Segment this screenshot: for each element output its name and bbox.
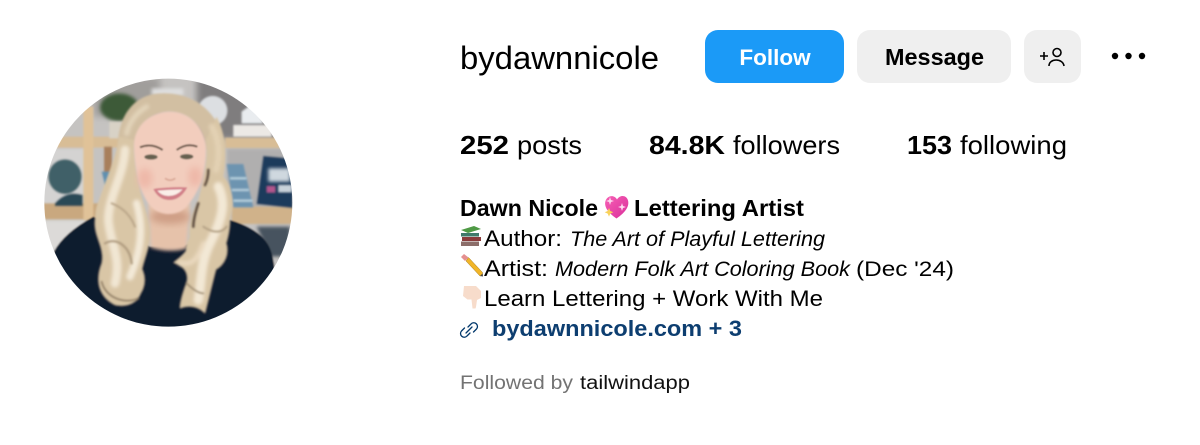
followed by note: Followed by <box>460 373 574 394</box>
bio line: artist <box>484 256 954 281</box>
follow button: Follow <box>739 45 811 70</box>
followed by note: tailwindapp <box>580 373 690 394</box>
stat: following <box>907 130 1067 160</box>
stat: posts <box>460 130 582 160</box>
hair shadows <box>102 170 227 301</box>
face <box>134 112 206 214</box>
follow button <box>705 30 844 83</box>
followed by note <box>460 373 690 394</box>
stat: followers <box>649 130 840 160</box>
stat: followers: 84.8K <box>649 130 725 160</box>
add friend button <box>1024 30 1081 83</box>
bio line: artist: Artist: <box>484 256 548 281</box>
message button <box>857 30 1011 83</box>
stat: following: following <box>960 130 1067 160</box>
icon: pencil <box>461 254 483 276</box>
hair masses <box>95 93 233 313</box>
navy sweater <box>50 217 276 337</box>
bio line: author: Author: <box>484 226 562 251</box>
more options dots <box>1112 53 1145 59</box>
stat: posts: posts <box>517 130 582 160</box>
photo background shelves <box>44 78 292 268</box>
bio line: author: The Art of Playful Lettering <box>570 227 825 251</box>
bio line: artist: (Dec '24) <box>856 257 954 281</box>
bio name: Dawn Nicole <box>460 195 598 221</box>
profile photo <box>40 77 300 337</box>
icon: sparkling heart <box>605 196 628 218</box>
hair highlights <box>108 107 222 300</box>
icon: link <box>461 323 477 337</box>
neck <box>148 203 190 251</box>
instagram profile header <box>44 30 1146 393</box>
stat: following: 153 <box>907 130 952 160</box>
stat: followers: followers <box>733 130 840 160</box>
bio title: Lettering Artist <box>634 195 804 221</box>
message button: Message <box>885 44 984 70</box>
bio line: learn lettering: Learn Lettering + Work With Me <box>484 286 823 311</box>
chin shadow <box>150 209 190 224</box>
icon: pointing down hand <box>463 286 481 308</box>
facial features <box>140 145 197 200</box>
username: bydawnnicole <box>460 40 659 76</box>
website link: bydawnnicole.com + 3 <box>492 316 742 341</box>
stat: posts: 252 <box>460 130 509 160</box>
icon: add person <box>1040 48 1064 66</box>
icon: books <box>461 226 481 246</box>
bio line: artist: Modern Folk Art Coloring Book <box>555 257 851 281</box>
